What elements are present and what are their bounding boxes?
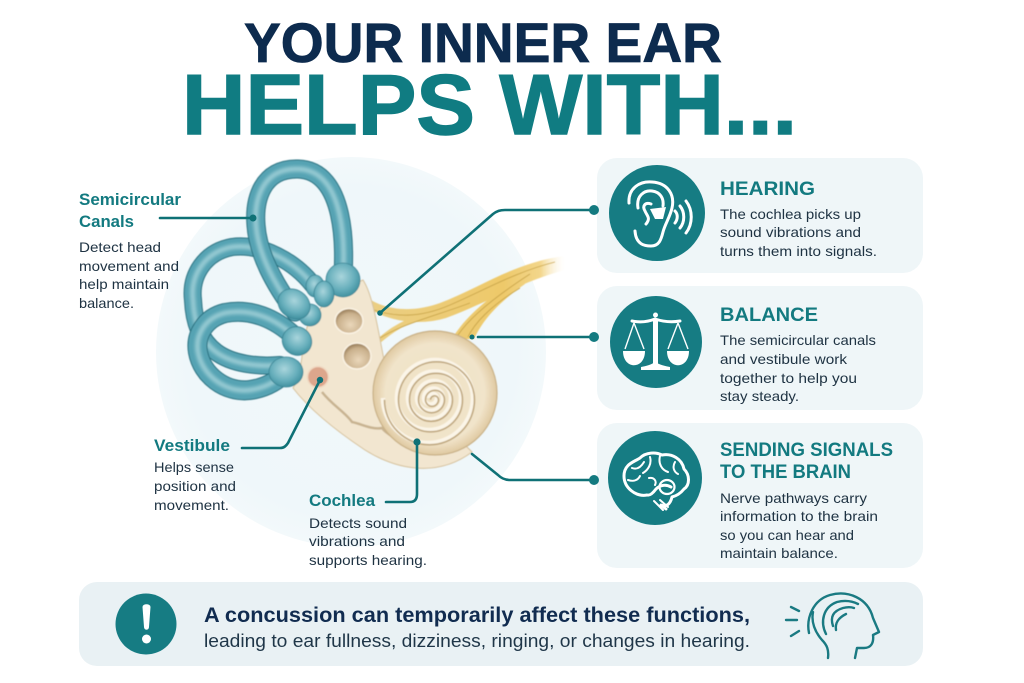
title: HELPS WITH... xyxy=(182,58,797,153)
panel: hearing: turns them into signals. xyxy=(720,243,877,259)
icon: ear xyxy=(629,182,691,246)
icon: head xyxy=(786,594,879,658)
background circle xyxy=(156,157,546,547)
bony vestibule body xyxy=(293,280,472,468)
label: semicircular canals: Semicircular xyxy=(79,191,182,209)
panel: balance: and vestibule work xyxy=(720,351,848,367)
panel: sending signals: TO THE BRAIN xyxy=(720,461,851,483)
label: semicircular canals: help maintain xyxy=(79,276,169,292)
panel: hearing: The cochlea picks up xyxy=(720,206,861,222)
lower semicircular canal xyxy=(197,312,295,390)
panel: balance xyxy=(597,286,923,410)
panel: balance: The semicircular canals xyxy=(720,332,876,348)
label: semicircular canals: balance. xyxy=(79,295,134,311)
panel: sending signals xyxy=(597,423,923,568)
label: semicircular canals: Canals xyxy=(79,213,134,231)
label: semicircular canals: Detect head xyxy=(79,239,161,255)
top semicircular canal xyxy=(256,169,344,312)
label: semicircular canals xyxy=(79,191,182,311)
panel: hearing xyxy=(597,158,923,273)
panel: sending signals: maintain balance. xyxy=(720,545,838,561)
label: vestibule: Helps sense xyxy=(154,459,234,475)
label: cochlea: vibrations and xyxy=(309,533,405,549)
icon: scales xyxy=(623,312,689,370)
panel: sending signals: Nerve pathways carry xyxy=(720,490,867,506)
title: YOUR INNER EAR xyxy=(244,11,722,74)
icon: brain xyxy=(624,453,688,510)
panel: concussion callout: A concussion can temporarily affect these functions, xyxy=(204,604,750,627)
label: vestibule: Vestibule xyxy=(154,437,230,455)
icon: alert xyxy=(116,594,176,654)
auditory nerve xyxy=(366,256,565,351)
title xyxy=(182,11,797,153)
ampullae xyxy=(269,263,360,387)
ear anatomy illustration xyxy=(193,169,565,468)
label: vestibule: position and xyxy=(154,478,236,494)
panel: balance: stay steady. xyxy=(720,388,799,404)
label: cochlea xyxy=(309,492,427,568)
panel: concussion callout: leading to ear fullness, dizziness, ringing, or changes in hearing. xyxy=(204,631,750,651)
panel: sending signals: SENDING SIGNALS xyxy=(720,439,893,461)
panel: concussion callout xyxy=(79,582,923,666)
panel: hearing: sound vibrations and xyxy=(720,224,861,240)
label: vestibule xyxy=(154,437,236,513)
panel: sending signals: information to the brain xyxy=(720,508,878,524)
panel: balance: BALANCE xyxy=(720,304,818,326)
label: vestibule: movement. xyxy=(154,497,229,513)
panel: sending signals: so you can hear and xyxy=(720,527,854,543)
label: cochlea: Cochlea xyxy=(309,492,376,510)
label: cochlea: Detects sound xyxy=(309,515,407,531)
vestibule openings xyxy=(335,308,363,334)
label: semicircular canals: movement and xyxy=(79,258,179,274)
cochlea xyxy=(373,331,497,455)
second semicircular canal xyxy=(193,246,313,366)
panel: hearing: HEARING xyxy=(720,178,815,200)
connector lines xyxy=(160,205,599,502)
label: cochlea: supports hearing. xyxy=(309,552,427,568)
panel: balance: together to help you xyxy=(720,370,857,386)
